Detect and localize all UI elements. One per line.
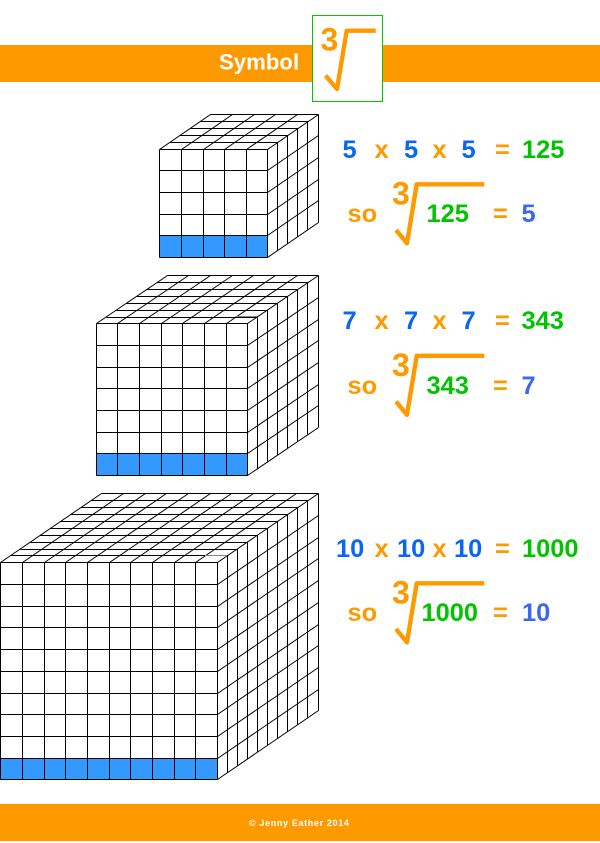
equation: 5 x 5 x 5 = 125: = — [495, 136, 510, 164]
equation: cube root of 1000 = 10: so — [348, 599, 377, 627]
cube 5x5x5 — [160, 114, 318, 258]
equation: 7 x 7 x 7 = 343: 7 — [462, 307, 476, 335]
equation: cube root of 125 = 5: = — [493, 200, 508, 228]
symbol box: cube root sign: 3 — [320, 22, 338, 58]
equation: 5 x 5 x 5 = 125: x — [432, 136, 447, 164]
header title: Symbol — [219, 50, 299, 74]
equation: 10 x 10 x 10 = 1000: 10 — [397, 535, 425, 563]
equation: cube root of 343 = 7 — [348, 347, 536, 415]
equation: cube root of 1000 = 10: 10 — [522, 599, 550, 627]
equation: cube root of 1000 = 10: = — [493, 599, 508, 627]
equation: 7 x 7 x 7 = 343: 343 — [522, 307, 564, 335]
equation: cube root of 1000 = 10: 1000 — [422, 599, 478, 627]
equation: cube root of 1000 = 10 — [348, 574, 550, 642]
equation: 10 x 10 x 10 = 1000 — [336, 535, 578, 563]
equation: 10 x 10 x 10 = 1000: = — [495, 535, 510, 563]
equation: 7 x 7 x 7 = 343: x — [432, 307, 447, 335]
equation: 5 x 5 x 5 = 125: 5 — [342, 136, 357, 164]
symbol box: cube root sign — [312, 16, 382, 102]
header band — [0, 45, 600, 82]
equation: cube root of 125 = 5: 125 — [426, 200, 469, 228]
equation: 10 x 10 x 10 = 1000: 10 — [454, 535, 482, 563]
equation: 7 x 7 x 7 = 343: x — [374, 307, 389, 335]
footer band — [0, 804, 600, 841]
equation: cube root of 125 = 5: 5 — [522, 200, 536, 228]
cube 7x7x7 — [96, 276, 318, 476]
equation: 7 x 7 x 7 = 343: 7 — [342, 307, 357, 335]
equation: 10 x 10 x 10 = 1000: x — [432, 535, 447, 563]
equation: cube root of 343 = 7: 7 — [522, 372, 536, 400]
equation: 5 x 5 x 5 = 125: 5 — [404, 136, 418, 164]
equation: 5 x 5 x 5 = 125: x — [374, 136, 389, 164]
equation: cube root of 125 = 5: 3 — [392, 176, 410, 212]
equation: cube root of 343 = 7: 343 — [426, 372, 469, 400]
cube 10x10x10 — [0, 494, 318, 780]
equation: cube root of 125 = 5 — [348, 176, 536, 243]
equation: cube root of 1000 = 10: 3 — [392, 574, 410, 610]
equation: 10 x 10 x 10 = 1000: x — [374, 535, 389, 563]
equation: 10 x 10 x 10 = 1000: 1000 — [522, 535, 578, 563]
equation: 7 x 7 x 7 = 343: = — [495, 307, 510, 335]
equation: cube root of 343 = 7: so — [348, 372, 377, 400]
equation: 5 x 5 x 5 = 125: 5 — [462, 136, 476, 164]
equation: cube root of 343 = 7: = — [493, 372, 508, 400]
equation: 5 x 5 x 5 = 125: 125 — [522, 136, 564, 164]
equation: cube root of 125 = 5: so — [348, 200, 377, 228]
equation: 10 x 10 x 10 = 1000: 10 — [336, 535, 364, 563]
equation: 5 x 5 x 5 = 125 — [342, 136, 564, 164]
equation: cube root of 343 = 7: 3 — [392, 347, 410, 383]
equation: 7 x 7 x 7 = 343: 7 — [404, 307, 418, 335]
equation: 7 x 7 x 7 = 343 — [342, 307, 564, 335]
footer credit: © Jenny Eather 2014 — [249, 818, 350, 828]
